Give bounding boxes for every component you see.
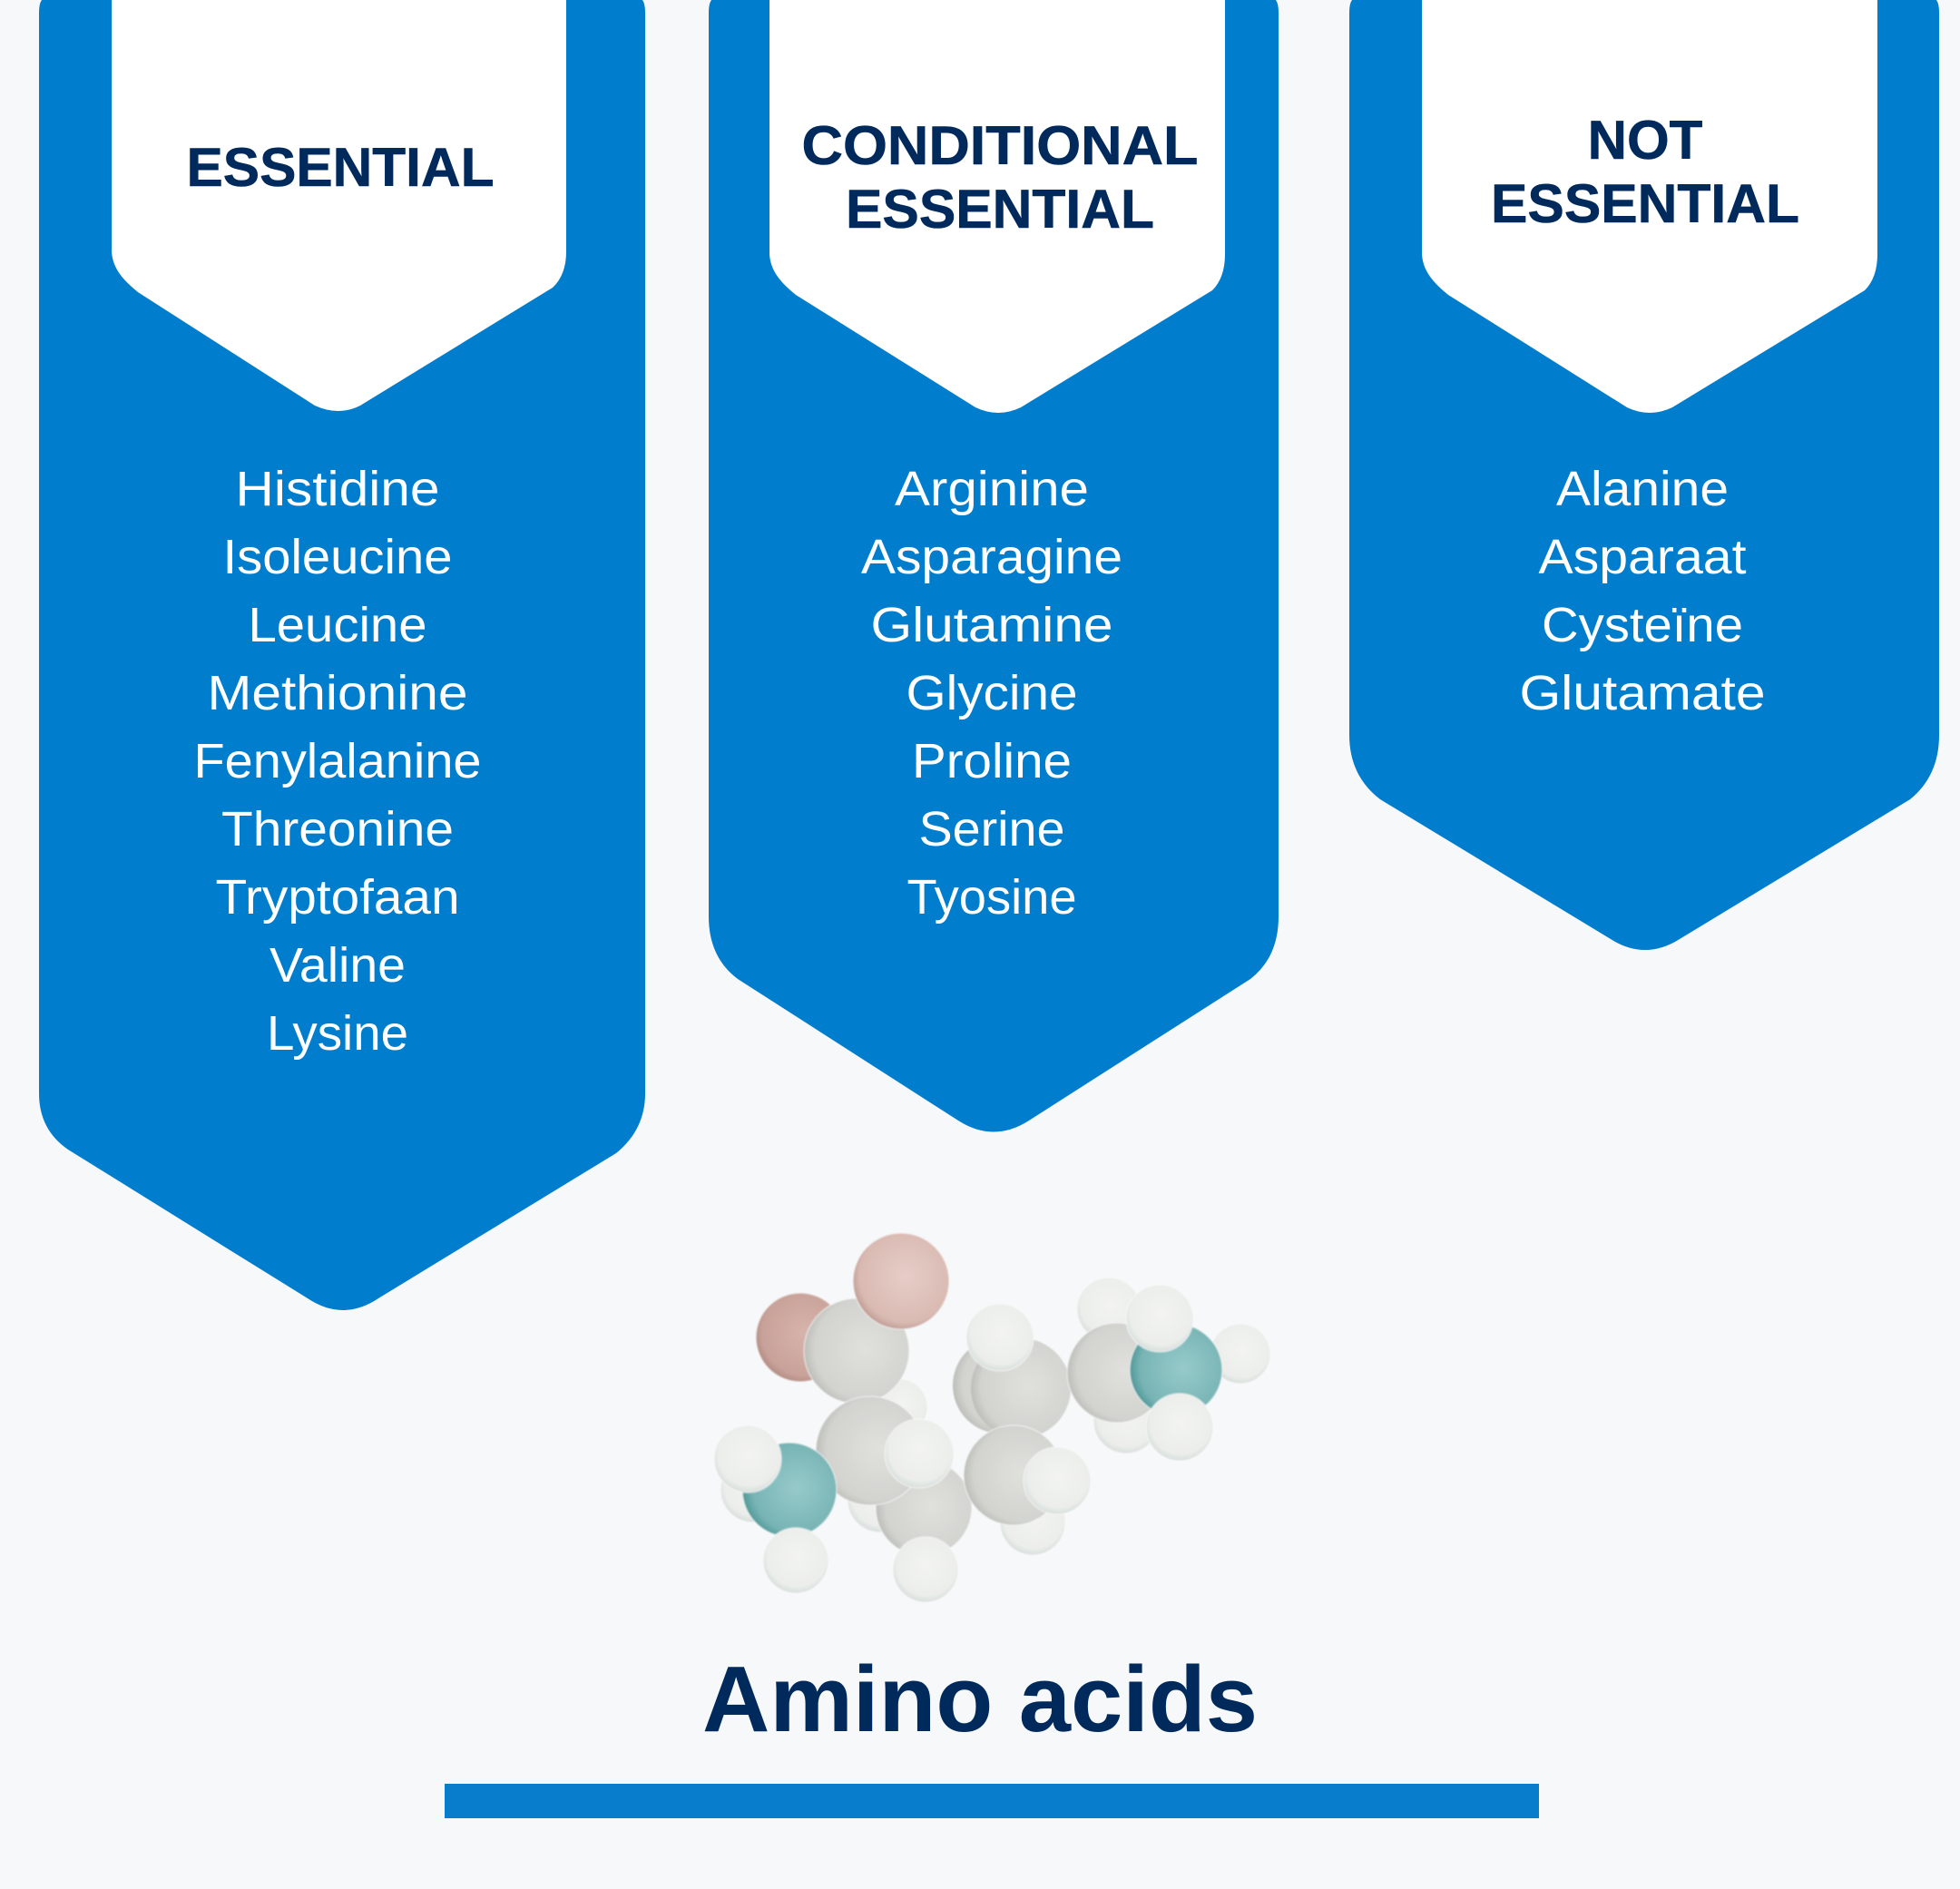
- list: essential amino acids: Leucine: [249, 598, 426, 652]
- panel shape: conditional essential: [709, 0, 1279, 1132]
- list: non-essential amino acids: Alanine: [1556, 462, 1729, 516]
- panel: essential: [39, 0, 645, 1310]
- list: essential amino acids: Methionine: [207, 666, 468, 720]
- heading: not essential: [1491, 110, 1799, 234]
- list: conditional amino acids: Glutamine: [871, 598, 1112, 652]
- heading: conditional essential: ESSENTIAL: [846, 179, 1154, 240]
- panel shape: essential: [39, 0, 645, 1310]
- list: essential amino acids: Valine: [270, 938, 406, 993]
- list: essential amino acids: Threonine: [221, 802, 454, 856]
- heading: not essential: NOT: [1588, 110, 1702, 171]
- list: non-essential amino acids: Cysteïne: [1542, 598, 1743, 652]
- list: essential amino acids: Fenylalanine: [194, 734, 481, 788]
- list: non-essential amino acids: [1519, 462, 1766, 720]
- list: essential amino acids: [194, 462, 481, 1061]
- title: Amino acids: [702, 1647, 1258, 1751]
- heading: not essential: ESSENTIAL: [1491, 173, 1799, 234]
- header tab: essential: [112, 0, 566, 411]
- list: conditional amino acids: Asparagine: [861, 530, 1122, 584]
- heading: essential: ESSENTIAL: [187, 137, 494, 198]
- header tab: conditional essential: [769, 0, 1225, 413]
- heading: conditional essential: CONDITIONAL: [802, 115, 1198, 176]
- list: non-essential amino acids: Asparaat: [1539, 530, 1746, 584]
- list: conditional amino acids: Arginine: [895, 462, 1089, 516]
- list: essential amino acids: Lysine: [267, 1006, 408, 1061]
- list: essential amino acids: Tryptofaan: [216, 870, 459, 925]
- header tab: not essential: [1422, 0, 1877, 413]
- list: conditional amino acids: Glycine: [906, 666, 1078, 720]
- icon: amino acid molecule: [714, 1233, 1270, 1602]
- panel shape: not essential: [1349, 0, 1939, 950]
- panel: conditional essential: [709, 0, 1279, 1132]
- list: conditional amino acids: [861, 462, 1122, 925]
- heading: conditional essential: [802, 115, 1198, 240]
- list: essential amino acids: Histidine: [236, 462, 439, 516]
- list: non-essential amino acids: Glutamate: [1519, 666, 1766, 720]
- title underline bar: [445, 1784, 1539, 1818]
- list: essential amino acids: Isoleucine: [223, 530, 452, 584]
- list: conditional amino acids: Tyosine: [907, 870, 1076, 925]
- list: conditional amino acids: Serine: [918, 802, 1065, 856]
- list: conditional amino acids: Proline: [912, 734, 1072, 788]
- panel: not essential: [1349, 0, 1939, 950]
